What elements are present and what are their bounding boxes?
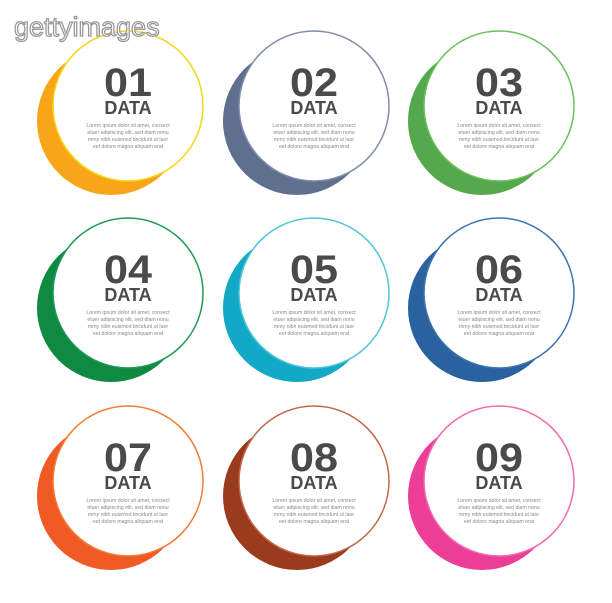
panel: 01: DATA bbox=[104, 98, 152, 118]
panel: 06: Lorem ipsum dolor sit amet, consect bbox=[457, 310, 541, 316]
panel: 08: etuer adipiscing elit, sed diam nonu bbox=[273, 505, 355, 511]
panel: 07: DATA bbox=[104, 473, 152, 493]
panel: 01: Lorem ipsum dolor sit amet, consect bbox=[86, 123, 170, 129]
panel: 05: mmy nibh euismod tincidunt ut laor bbox=[274, 324, 354, 330]
panel: 07: eet dolore magna aliquam erat bbox=[93, 519, 164, 525]
panel: 01: eet dolore magna aliquam erat bbox=[93, 144, 164, 150]
panel: 08: Lorem ipsum dolor sit amet, consect bbox=[272, 498, 356, 504]
panel: 08 bbox=[223, 406, 389, 570]
panel: 09: 09 bbox=[475, 436, 523, 480]
panel: 02: eet dolore magna aliquam erat bbox=[279, 144, 350, 150]
panel: 08: 08 bbox=[290, 436, 338, 480]
panel: 01: 01 bbox=[104, 61, 152, 105]
panel: 05: DATA bbox=[290, 285, 338, 305]
panel: 04: etuer adipiscing elit, sed diam nonu bbox=[87, 317, 169, 323]
panel: 08: DATA bbox=[290, 473, 338, 493]
panel: 05: 05 bbox=[290, 248, 338, 292]
panel: 09: etuer adipiscing elit, sed diam nonu bbox=[458, 505, 540, 511]
panel: 05: eet dolore magna aliquam erat bbox=[279, 331, 350, 337]
watermark: gettyimages bbox=[14, 12, 160, 42]
panel: 07 bbox=[37, 406, 203, 570]
panel: 06: DATA bbox=[475, 285, 523, 305]
panel: 02: DATA bbox=[290, 98, 338, 118]
panel: 04: eet dolore magna aliquam erat bbox=[93, 331, 164, 337]
panel: 04: mmy nibh euismod tincidunt ut laor bbox=[88, 324, 168, 330]
panel: 02: 02 bbox=[290, 61, 338, 105]
panel: 09: mmy nibh euismod tincidunt ut laor bbox=[459, 512, 539, 518]
panel: 08: mmy nibh euismod tincidunt ut laor bbox=[274, 512, 354, 518]
panel: 06: 06 bbox=[475, 248, 523, 292]
panel: 08: eet dolore magna aliquam erat bbox=[279, 519, 350, 525]
panel: 04: 04 bbox=[104, 248, 153, 292]
panel: 05 bbox=[223, 218, 389, 382]
panel: 09: eet dolore magna aliquam erat bbox=[464, 519, 535, 525]
panel: 04: DATA bbox=[104, 285, 152, 305]
panel: 04 bbox=[37, 218, 203, 382]
panel: 06: etuer adipiscing elit, sed diam nonu bbox=[458, 317, 540, 323]
panel: 02: etuer adipiscing elit, sed diam nonu bbox=[273, 130, 355, 136]
panel: 07: Lorem ipsum dolor sit amet, consect bbox=[86, 498, 170, 504]
panel: 04: Lorem ipsum dolor sit amet, consect bbox=[86, 310, 170, 316]
panel: 03: eet dolore magna aliquam erat bbox=[464, 144, 535, 150]
panel: 03: Lorem ipsum dolor sit amet, consect bbox=[457, 123, 541, 129]
panel: 02 bbox=[223, 31, 389, 195]
panel: 09 bbox=[408, 406, 574, 570]
panel: 03: 03 bbox=[475, 61, 523, 105]
panel: 06: eet dolore magna aliquam erat bbox=[464, 331, 535, 337]
panel: 01: mmy nibh euismod tincidunt ut laor bbox=[88, 137, 168, 143]
panel: 01: etuer adipiscing elit, sed diam nonu bbox=[87, 130, 169, 136]
panel: 03 bbox=[408, 31, 574, 195]
panel: 07: 07 bbox=[104, 436, 152, 480]
panel: 02: mmy nibh euismod tincidunt ut laor bbox=[274, 137, 354, 143]
panel: 07: mmy nibh euismod tincidunt ut laor bbox=[88, 512, 168, 518]
panel: 02: Lorem ipsum dolor sit amet, consect bbox=[272, 123, 356, 129]
panel: 06 bbox=[408, 218, 574, 382]
panel: 03: mmy nibh euismod tincidunt ut laor bbox=[459, 137, 539, 143]
panel: 05: Lorem ipsum dolor sit amet, consect bbox=[272, 310, 356, 316]
panel: 03: DATA bbox=[475, 98, 523, 118]
panel: 01 bbox=[37, 31, 203, 195]
panel: 06: mmy nibh euismod tincidunt ut laor bbox=[459, 324, 539, 330]
panel: 07: etuer adipiscing elit, sed diam nonu bbox=[87, 505, 169, 511]
panel: 03: etuer adipiscing elit, sed diam nonu bbox=[458, 130, 540, 136]
panel: 09: DATA bbox=[475, 473, 523, 493]
panel: 05: etuer adipiscing elit, sed diam nonu bbox=[273, 317, 355, 323]
panel: 09: Lorem ipsum dolor sit amet, consect bbox=[457, 498, 541, 504]
